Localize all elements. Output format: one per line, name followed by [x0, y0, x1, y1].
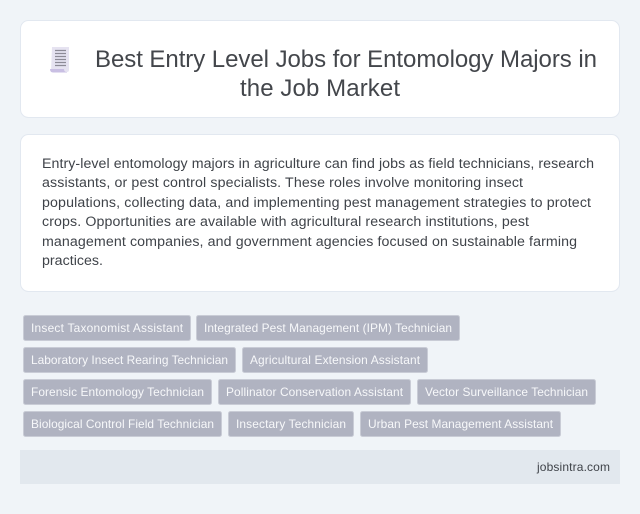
tag: Insect Taxonomist Assistant: Insect Taxonomist Assistant — [31, 321, 184, 335]
tag: Insectary Technician — [228, 412, 354, 436]
text block: description: Entry-level entomology majors in agriculture can find jobs as field technicians, research — [42, 156, 594, 172]
tag: Pollinator Conservation Assistant — [218, 380, 410, 404]
tag: Pollinator Conservation Assistant: Pollinator Conservation Assistant — [226, 385, 404, 399]
text block: description: management companies, and government agencies focused on sustainable farming — [42, 234, 577, 250]
title: Best Entry Level Jobs for Entomology Majors in — [95, 46, 597, 73]
tag: Laboratory Insect Rearing Technician: Laboratory Insect Rearing Technician — [31, 353, 228, 367]
tag: Urban Pest Management Assistant: Urban Pest Management Assistant — [368, 417, 554, 431]
tag: Forensic Entomology Technician: Forensic Entomology Technician — [31, 385, 204, 399]
tag: Agricultural Extension Assistant: Agricultural Extension Assistant — [250, 353, 421, 367]
tag: Forensic Entomology Technician — [24, 380, 212, 404]
footer source text: jobsintra.com — [536, 460, 610, 474]
tag list: job titles — [24, 316, 596, 436]
title — [95, 46, 597, 102]
text block: description: crops. Opportunities are available with agricultural research institutions, pest — [42, 214, 529, 230]
tag: Insectary Technician: Insectary Technician — [236, 417, 346, 431]
footer bar — [20, 450, 620, 484]
tag: Biological Control Field Technician: Biological Control Field Technician — [31, 417, 214, 431]
tag: Agricultural Extension Assistant — [242, 348, 428, 372]
text block: description: populations, collecting data, and implementing pest management strategies to protect — [42, 195, 591, 211]
tag: Vector Surveillance Technician — [418, 380, 596, 404]
tag: Laboratory Insect Rearing Technician — [24, 348, 236, 372]
tag: Vector Surveillance Technician: Vector Surveillance Technician — [425, 385, 588, 399]
tag: Integrated Pest Management (IPM) Technician: Integrated Pest Management (IPM) Technician — [204, 321, 452, 335]
panel: description card — [20, 134, 620, 292]
text block: description — [42, 156, 594, 269]
icon: document scroll — [50, 47, 69, 72]
tag: Insect Taxonomist Assistant — [24, 316, 190, 340]
text block: description: assistants, or pest control specialists. These roles involve monitoring insect — [42, 175, 523, 191]
title: the Job Market — [240, 75, 400, 102]
tag: Integrated Pest Management (IPM) Technician — [196, 316, 460, 340]
tag: Urban Pest Management Assistant — [360, 412, 560, 436]
tag: Biological Control Field Technician — [24, 412, 222, 436]
text block: description: practices. — [42, 253, 103, 269]
panel: header card — [20, 20, 620, 118]
